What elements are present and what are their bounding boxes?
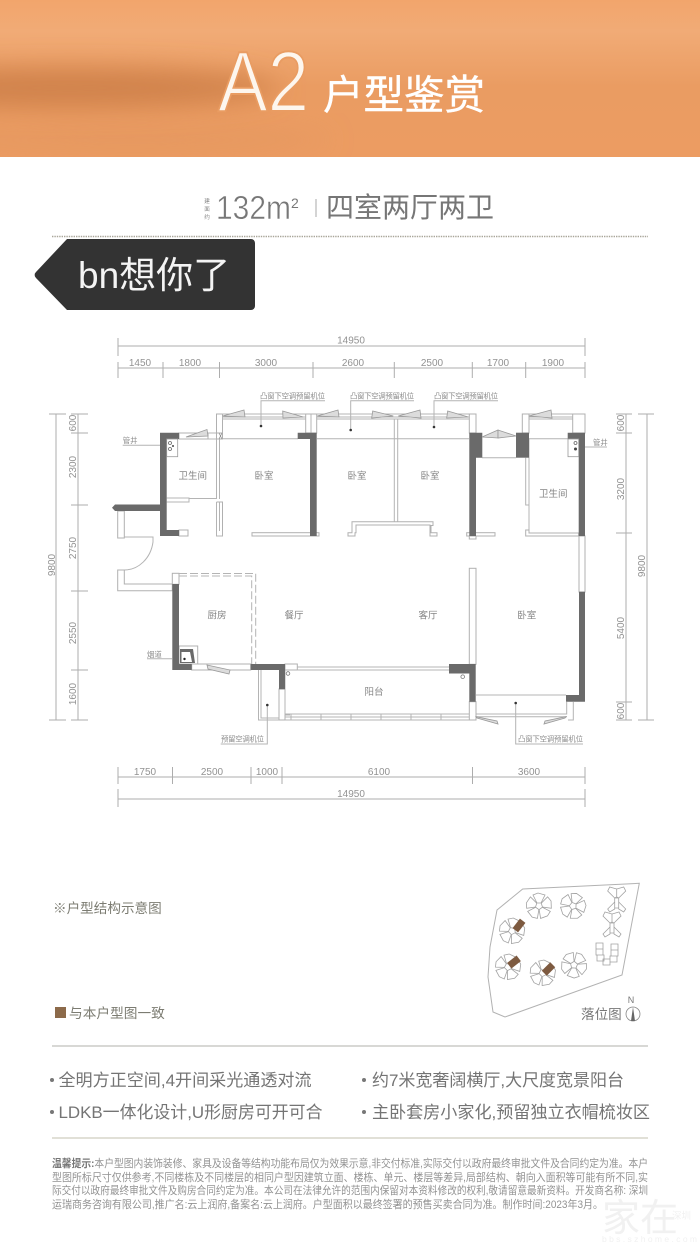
callouts: 凸窗下空调预留机位	[434, 392, 499, 400]
dimensions: left	[47, 414, 88, 720]
dimensions: bottom: 1750	[134, 767, 157, 778]
badge	[35, 239, 255, 310]
dimensions: top: 14950	[337, 336, 365, 346]
dimensions: bottom: 14950	[337, 789, 365, 800]
room labels: 餐厅	[284, 610, 304, 622]
callouts	[123, 392, 608, 744]
outlined walls and window rails	[118, 414, 585, 720]
locator caption and compass: 落位图	[581, 1007, 622, 1022]
disclaimer: 温馨提示:本户型图内装饰装修、家具及设备等结构功能布局仅为效果示意,非交付标准,实际交付以政府最终审批文件及合同约定为准。本户	[52, 1157, 648, 1170]
watermark: 深圳	[672, 1211, 691, 1222]
locator caption and compass: N	[628, 995, 634, 1005]
dimensions: top: 1700	[487, 358, 510, 369]
callouts: 管井	[593, 438, 608, 447]
dimensions: top: 1450	[129, 358, 152, 369]
room labels: 卧室	[347, 470, 367, 482]
title: A2: A2	[218, 35, 309, 130]
dimensions: right: 600	[616, 702, 627, 719]
watermark: 家在	[602, 1198, 678, 1240]
locator caption and compass	[581, 995, 640, 1022]
dimensions: right: 600	[616, 414, 627, 431]
feature bullets	[50, 1071, 650, 1122]
floor plan	[112, 392, 608, 744]
dimensions: left: 2750	[68, 536, 79, 559]
feature bullets: 主卧套房小家化,预留独立衣帽梳妆区	[372, 1103, 650, 1122]
dimensions: right: 9800	[637, 554, 648, 577]
callouts: 烟道	[147, 650, 162, 659]
room labels: 厨房	[207, 610, 227, 622]
header banner	[0, 0, 700, 157]
dimensions: top: 1800	[179, 358, 202, 369]
dimensions: left: 9800	[47, 553, 58, 576]
dimensions: right: 5400	[616, 616, 627, 639]
dimensions: top: 2600	[342, 358, 365, 369]
callouts: 凸窗下空调预留机位	[350, 392, 415, 400]
dimensions: top: 1900	[542, 358, 565, 369]
dimensions: bottom: 6100	[368, 767, 391, 778]
callouts: 预留空调机位	[221, 734, 265, 744]
callouts: 凸窗下空调预留机位	[260, 392, 326, 400]
dimensions: bottom	[118, 767, 585, 807]
window flaps	[186, 410, 566, 724]
room labels	[178, 470, 568, 698]
title: 户型鉴赏: 户型鉴赏	[323, 72, 485, 118]
dimensions: right: 3200	[616, 477, 627, 500]
callouts: 管井	[123, 436, 137, 445]
area and room count: 约	[204, 213, 210, 221]
feature bullets: 全明方正空间,4开间采光通透对流	[58, 1071, 312, 1090]
watermark: bbs.szhome.com	[602, 1234, 697, 1244]
shafts and fixtures	[167, 433, 579, 678]
disclaimer: 运瑞商务咨询有限公司,推广名:云上润府,备案名:云上润府。户型面积以最终签署的预售买卖合同为准。制作时间:2023年3月。	[52, 1198, 603, 1211]
room labels: 客厅	[418, 610, 438, 622]
callouts: 凸窗下空调预留机位	[518, 734, 584, 744]
dimensions: left: 600	[68, 414, 79, 431]
badge: bn想你了	[78, 255, 230, 296]
disclaimer: 际交付以政府最终审批文件及购房合同约定为准。本公司在法律允许的范围内保留对本资料修改的权利,敬请留意最新资料。开发商名称: 深圳	[52, 1184, 648, 1197]
disclaimer	[52, 1157, 648, 1211]
dimensions: left: 1600	[68, 682, 79, 705]
dimensions: bottom: 2500	[201, 767, 224, 778]
dimensions: bottom: 1000	[256, 767, 279, 778]
room labels: 卫生间	[539, 488, 568, 500]
room labels: 阳台	[364, 686, 384, 698]
dimensions: top: 3000	[255, 358, 278, 369]
area and room count	[204, 189, 494, 226]
area and room count: 建	[204, 197, 210, 205]
room labels: 卧室	[517, 610, 536, 622]
disclaimer: 型图所标尺寸仅供参考,不同楼栋及不同楼层的相同户型因建筑立面、楼栋、单元、楼层等差异,局部结构、朝向入面积等可能有所不同,实	[52, 1171, 648, 1184]
room labels: 卧室	[420, 470, 440, 482]
area and room count: 面	[204, 206, 210, 213]
legend: structure diagram: ※户型结构示意图	[53, 900, 162, 916]
dimensions: top: 2500	[421, 358, 444, 369]
legend: same as this unit: 与本户型图一致	[69, 1005, 165, 1021]
room labels: 卧室	[254, 470, 274, 482]
room labels: 卫生间	[178, 470, 207, 482]
dimensions: left: 2550	[68, 621, 79, 644]
area and room count: 132m	[216, 189, 291, 226]
area and room count: 2	[291, 195, 299, 211]
feature bullets: 约7米宽奢阔横厅,大尺度宽景阳台	[372, 1071, 624, 1090]
area and room count: 四室两厅两卫	[326, 192, 494, 223]
feature bullets: LDKB一体化设计,U形厨房可开可合	[58, 1103, 323, 1122]
dimensions: left: 2300	[68, 455, 79, 478]
dimensions: bottom: 3600	[518, 767, 541, 778]
solid walls	[112, 433, 585, 702]
dimensions: right	[616, 414, 654, 720]
site plan	[488, 883, 639, 1017]
dimensions: top	[118, 336, 585, 378]
